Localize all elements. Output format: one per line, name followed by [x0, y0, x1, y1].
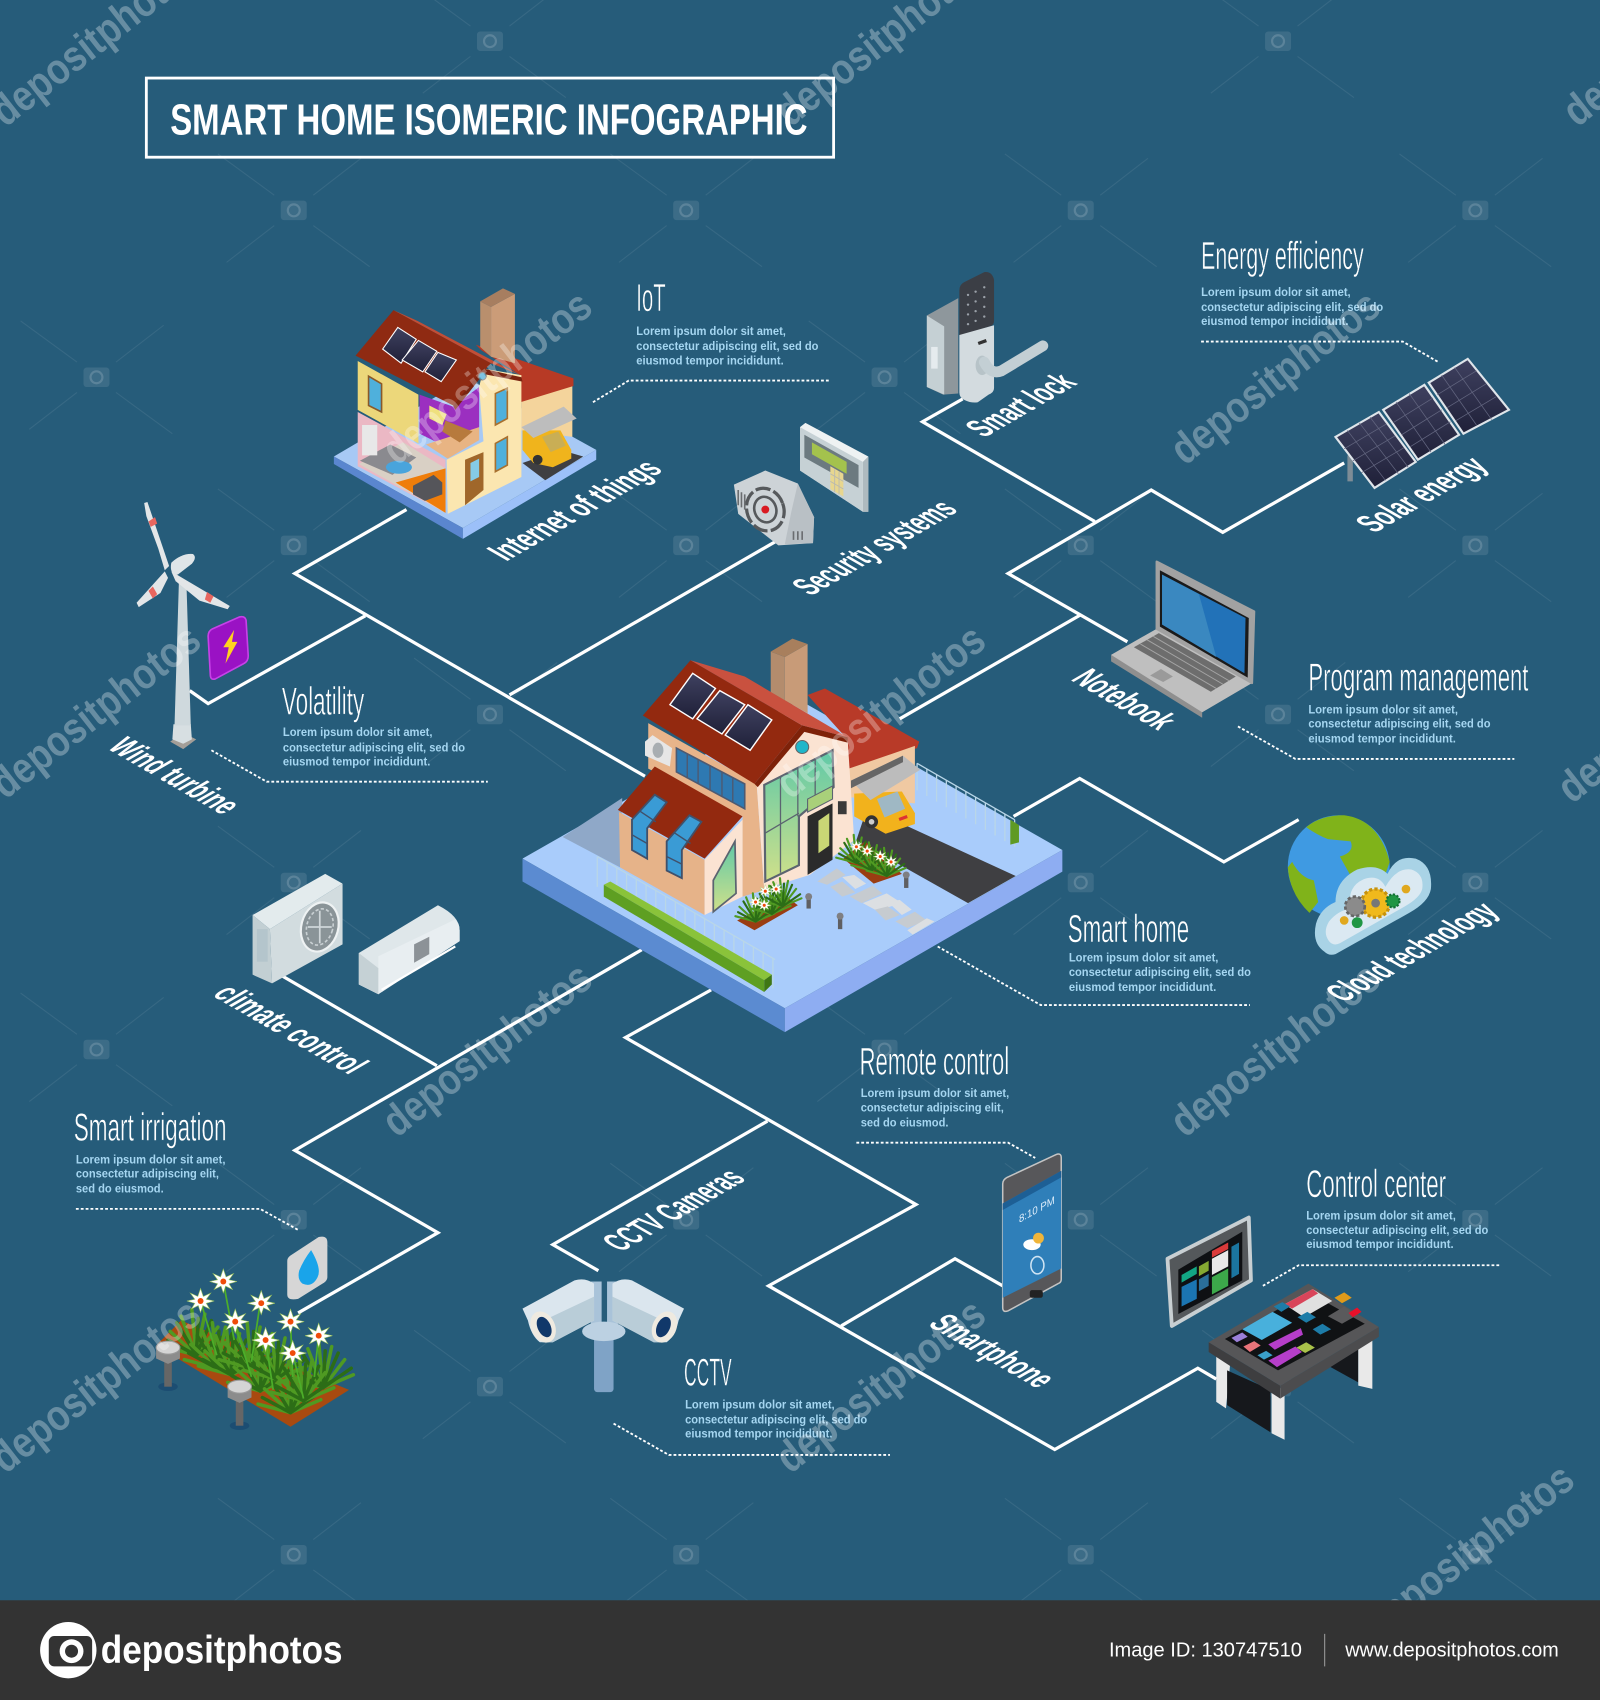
callout: Remote control: [860, 1040, 1009, 1129]
callout: IoT: consectetur adipiscing elit, sed do: [636, 339, 818, 353]
callout: CCTV: CCTV: [684, 1352, 732, 1395]
callout: Energy efficiency: consectetur adipiscing elit, sed do: [1201, 300, 1383, 314]
illustration: laptop: [1111, 562, 1254, 718]
footer bar: Image ID: 130747510: [1109, 1640, 1302, 1662]
callout: Remote control: consectetur adipiscing elit,: [861, 1100, 1004, 1114]
callout: Control center: eiusmod tempor incididunt.: [1306, 1237, 1454, 1251]
callout: Control center: Lorem ipsum dolor sit amet,: [1306, 1209, 1456, 1223]
title: SMART HOME ISOMERIC INFOGRAPHIC: [170, 96, 808, 144]
illustration: smartphone: 8:10 PM: [1019, 1194, 1055, 1226]
watermarks: depositphotos: [1161, 281, 1389, 474]
footer bar: depositphotos: [101, 1629, 343, 1672]
callout: Remote control: Lorem ipsum dolor sit amet,: [861, 1086, 1009, 1100]
label: Notebook: Notebook: [1063, 664, 1186, 735]
illustration: wall tablet: [1167, 1218, 1251, 1326]
icon: water drop tile: [287, 1237, 327, 1299]
callout: Remote control: Remote control: [860, 1040, 1009, 1083]
callout: Energy efficiency: [1201, 235, 1383, 328]
illustration: wind turbine: [137, 502, 230, 749]
callout: Program management: Lorem ipsum dolor sit amet,: [1308, 702, 1458, 716]
label: climate control: climate control: [204, 979, 377, 1079]
callout: IoT: eiusmod tempor incididunt.: [636, 353, 784, 367]
icon: lightning tile: [208, 617, 248, 679]
callout: Volatility: consectetur adipiscing elit, sed do: [283, 740, 465, 754]
callout: Volatility: [282, 680, 465, 768]
illustration: CCTV cameras: [522, 1279, 684, 1392]
footer logo icon: [40, 1622, 96, 1678]
label: CCTV Cameras: CCTV Cameras: [593, 1164, 754, 1256]
callout: Program management: consectetur adipiscing elit, sed do: [1308, 716, 1491, 730]
illustration: smart irrigation flower bed: [156, 1269, 353, 1430]
watermarks: depositphotos: [767, 615, 995, 808]
label: Solar energy: Solar energy: [1347, 451, 1496, 537]
callout: Smart irrigation: [74, 1107, 227, 1196]
callout: CCTV: [684, 1352, 867, 1441]
callout: Control center: [1306, 1163, 1488, 1251]
callout: Energy efficiency: Energy efficiency: [1201, 235, 1364, 278]
callout: Remote control: sed do eiusmod.: [861, 1115, 949, 1129]
footer bar: www.depositphotos.com: [1344, 1640, 1559, 1662]
label: Smart lock: Smart lock: [957, 368, 1085, 442]
callout: CCTV: Lorem ipsum dolor sit amet,: [685, 1397, 835, 1411]
illustration: smartphone: [1003, 1154, 1061, 1311]
illustration: security systems: [734, 423, 868, 545]
illustration: smart home main building: [522, 639, 1062, 1032]
dotted callout leaders: [76, 342, 1514, 1455]
label: Smartphone: Smartphone: [920, 1309, 1065, 1393]
callout: Smart home: consectetur adipiscing elit, sed do: [1069, 965, 1251, 979]
callout: Energy efficiency: eiusmod tempor incididunt.: [1201, 314, 1349, 328]
callout: Smart irrigation: consectetur adipiscing elit,: [76, 1166, 219, 1180]
watermarks: depositphotos: [1161, 954, 1389, 1146]
callout: Smart home: [1068, 908, 1251, 994]
callout: Energy efficiency: Lorem ipsum dolor sit amet,: [1201, 285, 1351, 299]
illustration: air conditioner units: [253, 874, 460, 994]
connector network: [190, 399, 1344, 1450]
illustration: touch table control center: [1209, 1284, 1379, 1440]
label: Security systems: Security systems: [783, 495, 966, 600]
callout: Smart home: Lorem ipsum dolor sit amet,: [1069, 951, 1218, 965]
callout: IoT: [636, 277, 818, 367]
illustration: IoT cutaway house: [334, 288, 596, 539]
title: [146, 78, 834, 157]
illustration: globe and cloud: [1288, 815, 1431, 955]
callout: Program management: eiusmod tempor incididunt.: [1308, 732, 1456, 746]
illustration: smart lock: [927, 272, 1043, 403]
callout: Control center: Control center: [1306, 1163, 1446, 1206]
label: Internet of things: Internet of things: [479, 455, 671, 566]
callout: Program management: [1308, 657, 1529, 746]
callout: Smart irrigation: sed do eiusmod.: [76, 1182, 164, 1196]
callout: CCTV: consectetur adipiscing elit, sed do: [685, 1413, 867, 1427]
callout: Smart irrigation: Lorem ipsum dolor sit amet,: [76, 1152, 225, 1166]
callout: CCTV: eiusmod tempor incididunt.: [685, 1427, 833, 1441]
callout: IoT: IoT: [636, 277, 666, 320]
callout: Smart irrigation: Smart irrigation: [74, 1107, 227, 1150]
callout: Volatility: Lorem ipsum dolor sit amet,: [283, 725, 433, 739]
illustration: solar panels: [1336, 359, 1509, 488]
watermarks: depositphotos: [373, 954, 601, 1146]
callout: Volatility: Volatility: [282, 680, 365, 723]
watermarks: depositphotos: [767, 1290, 995, 1482]
callout: Control center: consectetur adipiscing elit, sed do: [1306, 1223, 1488, 1237]
footer bar: [0, 1600, 1600, 1700]
callout: Smart home: Smart home: [1068, 908, 1189, 951]
callout: Smart home: eiusmod tempor incididunt.: [1069, 980, 1216, 994]
callout: IoT: Lorem ipsum dolor sit amet,: [636, 324, 786, 338]
label: Wind turbine: Wind turbine: [99, 732, 250, 819]
watermarks: depositphotos: [373, 281, 601, 474]
callout: Volatility: eiusmod tempor incididunt.: [283, 754, 430, 768]
